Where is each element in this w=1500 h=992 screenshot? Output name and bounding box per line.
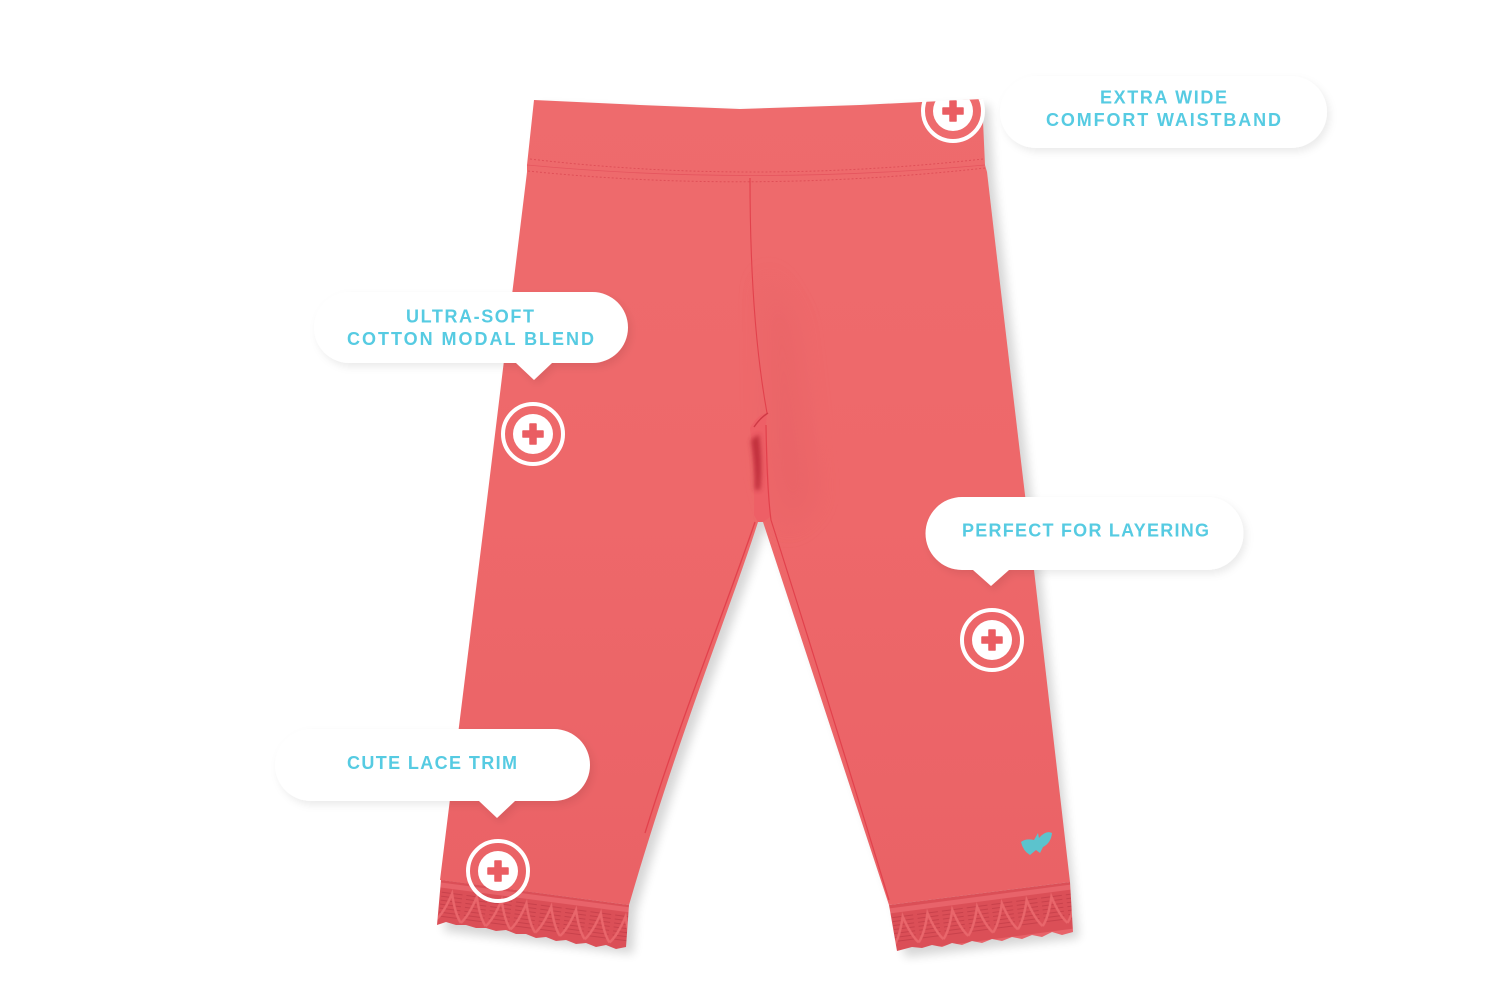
centre seam [750, 178, 767, 413]
leggings garment [437, 99, 1079, 957]
crotch shadow [751, 434, 761, 490]
leggings body [440, 99, 1070, 905]
callout: extra wide comfort waistband: COMFORT WAISTBAND [1046, 110, 1281, 130]
icon: plus marker waistband [921, 99, 985, 143]
callout: cute lace trim: CUTE LACE TRIM [347, 753, 517, 773]
garment shadow [444, 105, 1079, 957]
thigh shading [765, 270, 815, 530]
inner leg seam right [766, 425, 889, 900]
callout: ultra-soft cotton modal blend [314, 292, 628, 380]
callout: perfect for layering [926, 497, 1244, 586]
crotch crease [754, 413, 768, 427]
left lace trim [437, 880, 629, 949]
callout: ultra-soft cotton modal blend: ULTRA-SOFT [406, 306, 534, 326]
icon: fish logo [1021, 832, 1052, 855]
icon: plus marker lace [468, 841, 528, 901]
icon: plus marker thigh [503, 404, 563, 464]
icon: plus marker right leg [962, 610, 1022, 670]
callout: perfect for layering: PERFECT FOR LAYERING [962, 520, 1209, 540]
callout: ultra-soft cotton modal blend: COTTON MODAL BLEND [347, 329, 594, 349]
crotch fold [750, 413, 770, 522]
callout: extra wide comfort waistband [1000, 76, 1327, 148]
right lace trim [889, 882, 1073, 951]
inner leg seam left [645, 522, 755, 833]
callout: cute lace trim [275, 729, 590, 818]
waistband stitching [528, 159, 985, 182]
callout: extra wide comfort waistband: EXTRA WIDE [1100, 88, 1227, 108]
waistband seam line [527, 165, 985, 176]
